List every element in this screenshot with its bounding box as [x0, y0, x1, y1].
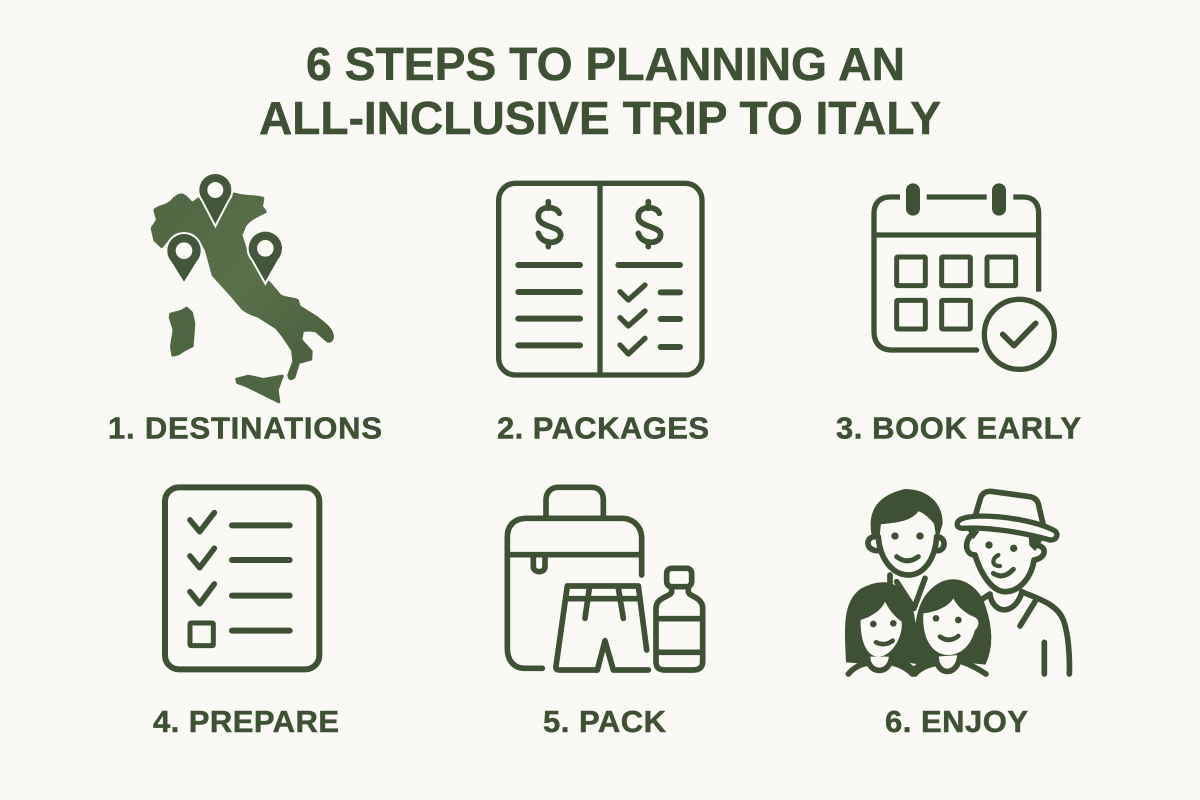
label: 1. DESTINATIONS: [108, 410, 382, 446]
label: 6. ENJOY: [885, 704, 1028, 739]
panel: step 1 destinations: [108, 174, 382, 445]
icon: Italy map with pins: [152, 174, 332, 402]
label: 2. PACKAGES: [497, 410, 709, 446]
title: [259, 38, 941, 144]
panel: step 5 pack: [507, 487, 703, 739]
icon: checklist: [165, 487, 319, 669]
panel: step 6 enjoy: [846, 490, 1069, 739]
panel: step 3 book early: [836, 183, 1081, 446]
panel: step 2 packages: [497, 183, 709, 446]
title: ALL-INCLUSIVE TRIP TO ITALY: [259, 92, 941, 144]
icon: price comparison book: [499, 183, 702, 375]
icon: suitcase, shorts and bottle: [507, 487, 703, 670]
icon: calendar with check: [874, 183, 1054, 369]
icon: family group: [846, 490, 1069, 674]
title: 6 STEPS TO PLANNING AN: [306, 38, 905, 90]
panel: step 4 prepare: [153, 487, 339, 739]
label: 5. PACK: [543, 704, 667, 739]
label: 3. BOOK EARLY: [836, 410, 1081, 446]
label: 4. PREPARE: [153, 704, 339, 739]
